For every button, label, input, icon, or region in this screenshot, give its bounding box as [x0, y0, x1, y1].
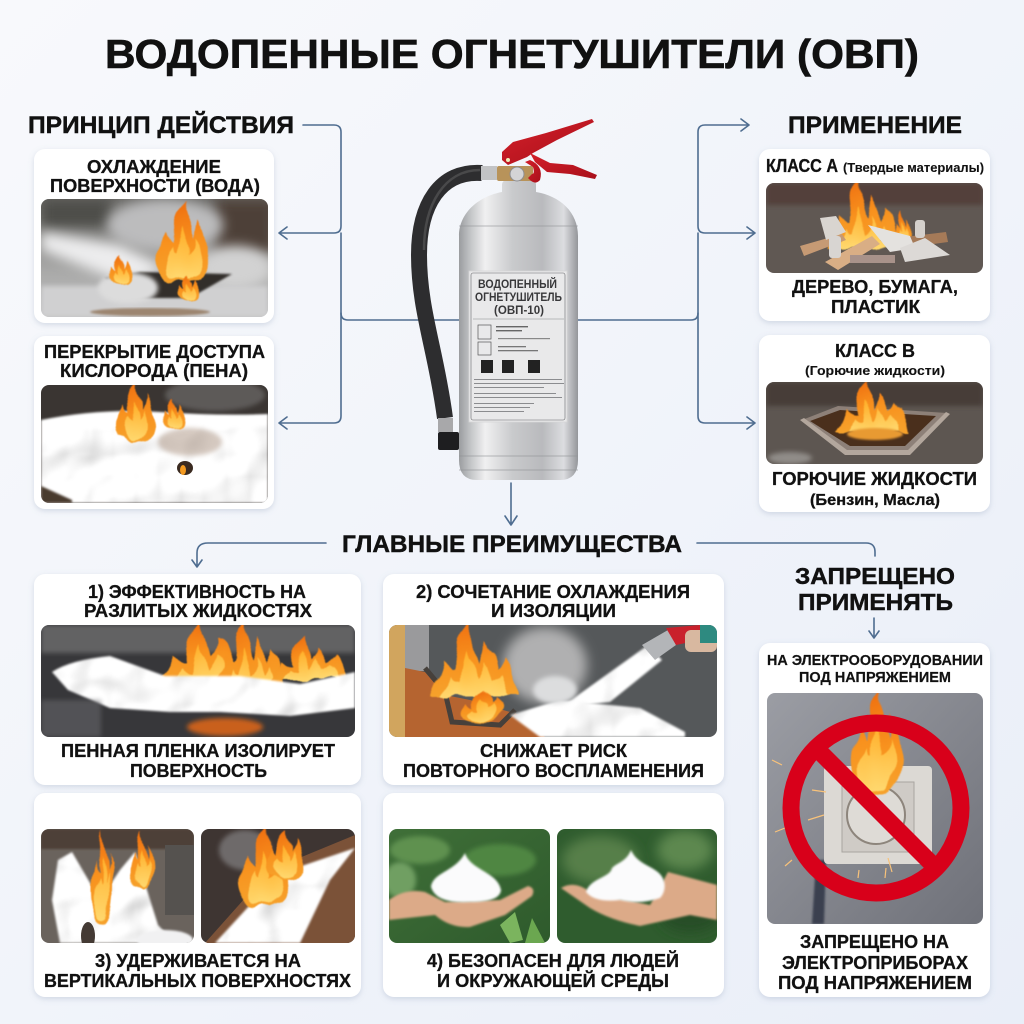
heading: water cooling: ОХЛАЖДЕНИЕ: [87, 157, 221, 177]
heading: class B: [805, 341, 945, 378]
caption: advantage 2: ПОВТОРНОГО ВОСПЛАМЕНЕНИЯ: [403, 761, 704, 781]
label plate: (ОВП-10): [494, 303, 544, 317]
icon: prohibition sign: [791, 723, 961, 893]
heading: advantage 1: 1) ЭФФЕКТИВНОСТЬ НА: [88, 582, 306, 602]
connector: to forbidden: [697, 543, 875, 556]
caption: wood paper plastic: ПЛАСТИК: [831, 297, 921, 317]
cylinder: [459, 180, 578, 480]
photo: foam on spilled fuel: [41, 623, 355, 737]
caption: flammable liquids: [772, 469, 977, 509]
photo: foam on slanted board: [201, 829, 355, 943]
photo: foam in hand with leaves: [384, 829, 550, 943]
arrow: extinguisher to advantages: [505, 483, 517, 525]
caption: forbidden on appliances: ЗАПРЕЩЕНО НА: [800, 932, 949, 952]
panel: advantage 3: [34, 793, 361, 997]
photo: foam in hand on green blur: [557, 829, 720, 943]
illustration: extinguisher: [419, 119, 597, 480]
title: ВОДОПЕННЫЕ ОГНЕТУШИТЕЛИ (ОВП): [105, 31, 919, 77]
heading: advantage 2: И ИЗОЛЯЦИИ: [491, 601, 616, 621]
caption: flammable liquids: (Бензин, Масла): [810, 492, 940, 509]
hose: [419, 166, 497, 450]
heading: live equipment: НА ЭЛЕКТРООБОРУДОВАНИИ: [767, 653, 983, 669]
heading: forbidden to use: ЗАПРЕЩЕНО: [795, 563, 955, 589]
caption: forbidden on appliances: ПОД НАПРЯЖЕНИЕМ: [778, 973, 972, 993]
heading: forbidden to use: [795, 563, 955, 615]
heading: advantage 1: РАЗЛИТЫХ ЖИДКОСТЯХ: [84, 601, 312, 621]
connector: advantages left arrow: [192, 543, 326, 567]
heading: class B: (Горючие жидкости): [805, 363, 945, 378]
photo: foam nozzle on burning wall: [389, 625, 717, 737]
panel: class B: [759, 335, 990, 512]
heading: live equipment: [767, 653, 983, 686]
photo: burning wood and paper: [766, 181, 983, 273]
caption: flammable liquids: ГОРЮЧИЕ ЖИДКОСТИ: [772, 469, 977, 489]
photo: water jet hitting fire: [41, 199, 275, 317]
caption: advantage 1: ПЕННАЯ ПЛЕНКА ИЗОЛИРУЕТ: [61, 741, 335, 761]
heading: class B: КЛАСС В: [835, 341, 915, 361]
caption: advantage 4: [427, 950, 679, 991]
panel: advantage 2: [383, 574, 724, 785]
caption: advantage 2: [403, 741, 704, 781]
photo: burning wall socket: [767, 693, 983, 924]
heading: water cooling: ПОВЕРХНОСТИ (ВОДА): [50, 176, 260, 196]
heading: foam blocks oxygen: ПЕРЕКРЫТИЕ ДОСТУПА: [44, 342, 265, 362]
photo: foam over fire: [41, 379, 268, 503]
heading: advantage 2: [416, 582, 690, 621]
photo: foam on vertical wall: [41, 829, 195, 950]
heading: application: ПРИМЕНЕНИЕ: [788, 112, 962, 139]
connector: left bracket with arrows: [279, 125, 462, 429]
heading: advantage 1: [84, 582, 312, 621]
heading: foam blocks oxygen: [44, 342, 265, 381]
caption: advantage 2: СНИЖАЕТ РИСК: [480, 741, 628, 761]
valve and red handle: [497, 119, 597, 183]
panel: advantage 4: [383, 793, 724, 997]
caption: advantage 4: И ОКРУЖАЮЩЕЙ СРЕДЫ: [437, 970, 669, 991]
photo: burning liquid tray: [766, 382, 983, 464]
panel: forbidden on live equipment: [759, 643, 990, 997]
caption: advantage 1: [61, 741, 335, 781]
caption: advantage 3: 3) УДЕРЖИВАЕТСЯ НА: [95, 951, 301, 971]
heading: principle of action: ПРИНЦИП ДЕЙСТВИЯ: [28, 111, 294, 139]
panel: advantage 1: [34, 574, 361, 785]
heading: water cooling: [50, 157, 260, 196]
heading: class A: КЛАСС А: [766, 156, 838, 176]
connector: right bracket with arrows: [576, 119, 755, 429]
caption: forbidden on appliances: [778, 932, 972, 993]
label plate: ОГНЕТУШИТЕЛЬ: [475, 290, 562, 304]
panel: foam blocks oxygen: [34, 336, 274, 509]
caption: advantage 3: ВЕРТИКАЛЬНЫХ ПОВЕРХНОСТЯХ: [44, 971, 351, 991]
label plate: ВОДОПЕННЫЙ: [478, 276, 557, 291]
heading: live equipment: ПОД НАПРЯЖЕНИЕМ: [799, 670, 951, 686]
panel: water cooling: [34, 149, 275, 323]
caption: forbidden on appliances: ЭЛЕКТРОПРИБОРАХ: [782, 953, 968, 973]
heading: advantage 2: 2) СОЧЕТАНИЕ ОХЛАЖДЕНИЯ: [416, 582, 690, 602]
caption: advantage 4: 4) БЕЗОПАСЕН ДЛЯ ЛЮДЕЙ: [427, 950, 679, 971]
caption: advantage 3: [44, 951, 351, 991]
heading: forbidden to use: ПРИМЕНЯТЬ: [798, 589, 953, 615]
caption: wood paper plastic: [792, 277, 958, 317]
arrow: down to forbidden card: [869, 618, 879, 638]
caption: wood paper plastic: ДЕРЕВО, БУМАГА,: [792, 277, 958, 297]
panel: class A: [759, 149, 990, 321]
cylinder seams: [459, 226, 578, 470]
caption: advantage 1: ПОВЕРХНОСТЬ: [130, 761, 267, 781]
heading: class A: (Твердые материалы): [843, 161, 984, 175]
heading: class A: [766, 156, 984, 176]
label plate: [469, 271, 567, 422]
heading: main advantages: ГЛАВНЫЕ ПРЕИМУЩЕСТВА: [342, 531, 682, 558]
heading: foam blocks oxygen: КИСЛОРОДА (ПЕНА): [60, 361, 248, 381]
